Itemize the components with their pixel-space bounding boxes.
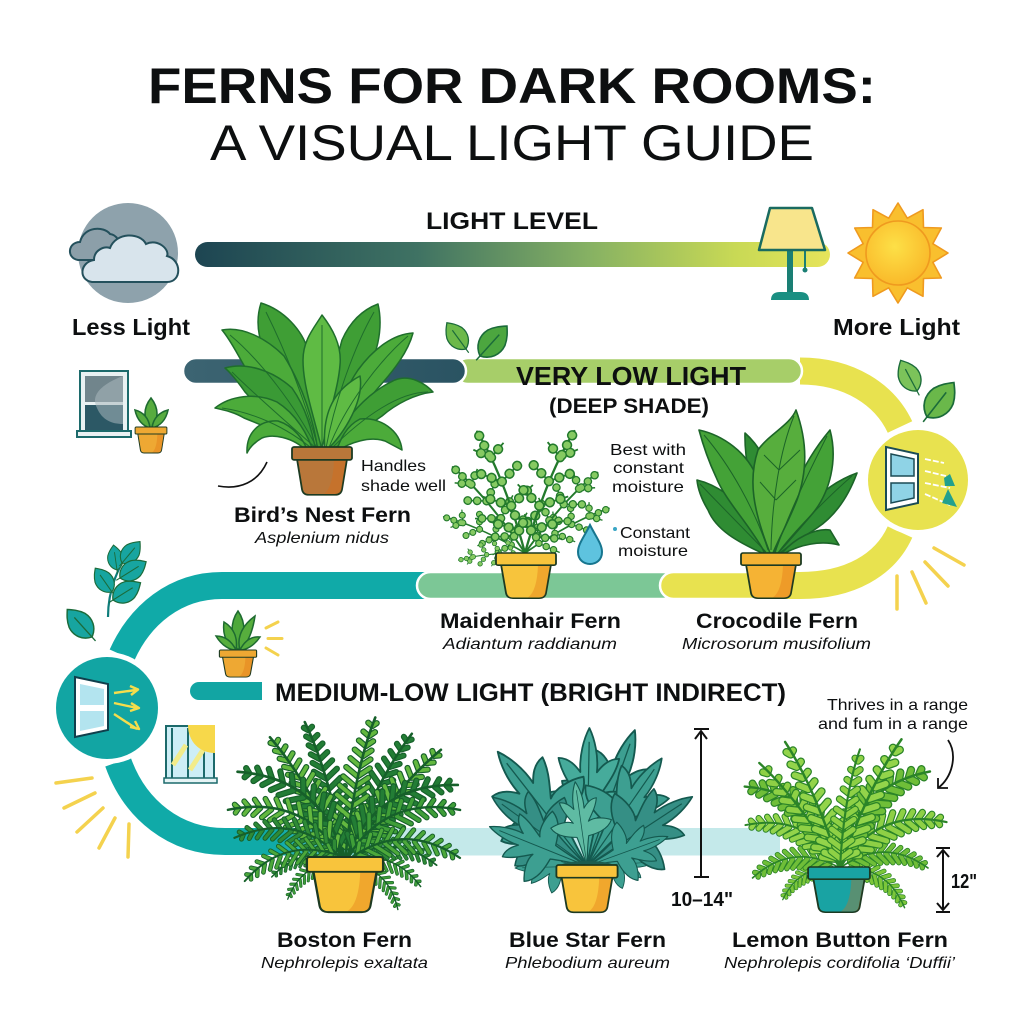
label: bird's nest fern: Asplenium nidus [254, 530, 389, 547]
label: lemon button fern: Lemon Button Fern [732, 929, 948, 952]
heading: light level: LIGHT LEVEL [426, 208, 598, 235]
rays: teal window [56, 778, 129, 857]
label: lemon button fern: Nephrolepis cordifolia ‘Duffii’ [724, 955, 956, 972]
title: FERNS FOR DARK ROOMS: [148, 58, 876, 114]
icon: water drop [578, 525, 617, 564]
label: crocodile fern [682, 610, 871, 653]
icon: small plant with rays [216, 611, 282, 677]
dimension: 12 inches [936, 848, 977, 912]
dimension: 10-14 inches: 10–14" [671, 889, 733, 911]
label: lemon button fern [724, 929, 956, 972]
plant: lemon button fern [744, 730, 947, 913]
label: blue star fern: Blue Star Fern [509, 929, 666, 952]
icon: window in yellow circle [863, 425, 973, 535]
heading: very low light: VERY LOW LIGHT [516, 361, 746, 391]
note: thrives in a range: and fum in a range [818, 716, 968, 733]
plant: blue star fern [457, 713, 717, 912]
note: handles shade well [361, 458, 446, 495]
pathway: teal lower arc and pale band [118, 762, 780, 856]
label: boston fern: Boston Fern [277, 929, 412, 952]
label: crocodile fern: Microsorum musifolium [682, 636, 871, 653]
label: more light: More Light [833, 314, 960, 340]
rays: yellow window [897, 548, 964, 609]
icon: cloud [70, 203, 178, 303]
title [148, 58, 876, 171]
note: handles shade well: shade well [361, 478, 446, 495]
plant: crocodile fern [697, 410, 857, 598]
note: constant moisture: moisture [618, 543, 688, 560]
light level gradient bar [195, 242, 830, 267]
note: constant moisture [618, 525, 691, 560]
pathway: yellow arc [780, 371, 900, 586]
label: less light: Less Light [72, 314, 190, 340]
note: thrives in a range [818, 697, 968, 733]
icon: lamp [759, 208, 825, 300]
note: best with constant moisture: Best with [610, 442, 686, 459]
pathway: light green segment [417, 572, 677, 599]
note: best with constant moisture: moisture [612, 479, 684, 496]
plant: boston fern [227, 715, 461, 915]
plant: maidenhair fern [440, 420, 613, 598]
label: crocodile fern: Crocodile Fern [696, 610, 858, 633]
dimension: 10-14 inches [671, 729, 733, 911]
icon: window in teal circle [51, 652, 163, 764]
label: bird's nest fern [234, 504, 411, 547]
decorative sprig: teal leaves [59, 536, 151, 649]
note: best with constant moisture [610, 442, 686, 496]
pathway: very low light green bar [455, 358, 802, 384]
decorative leaves: centre [439, 317, 516, 369]
note: thrives in a range: Thrives in a range [827, 697, 968, 714]
label: boston fern: Nephrolepis exaltata [261, 955, 428, 972]
pathway: dark shade bar [183, 358, 466, 384]
label: bird's nest fern: Bird’s Nest Fern [234, 504, 411, 527]
note: best with constant moisture: constant [613, 460, 685, 477]
heading: medium-low light: MEDIUM-LOW LIGHT (BRIGHT INDIRECT) [275, 679, 786, 707]
pathway: teal upper arc [122, 586, 430, 655]
decorative leaves: right [891, 355, 964, 430]
label: maidenhair fern [440, 610, 621, 653]
icon: dark window with small plant [77, 371, 168, 453]
medium-low light bar [190, 682, 262, 700]
title: A VISUAL LIGHT GUIDE [210, 115, 814, 171]
label: blue star fern: Phlebodium aureum [505, 955, 670, 972]
note: handles shade well: Handles [361, 458, 426, 475]
pathway: yellow rounded start [660, 572, 790, 599]
label: maidenhair fern: Adiantum raddianum [442, 636, 617, 653]
label: maidenhair fern: Maidenhair Fern [440, 610, 621, 633]
dimension: 12 inches: 12" [951, 871, 977, 893]
label: blue star fern [505, 929, 670, 972]
pointer curve [218, 462, 267, 487]
icon: sun [848, 203, 948, 303]
icon: sunny window [164, 725, 217, 783]
arrow: curved pointer [938, 740, 953, 788]
subheading: deep shade: (DEEP SHADE) [549, 395, 709, 418]
label: boston fern [261, 929, 428, 972]
note: constant moisture: Constant [620, 525, 691, 542]
plant: bird's nest fern [215, 303, 433, 495]
